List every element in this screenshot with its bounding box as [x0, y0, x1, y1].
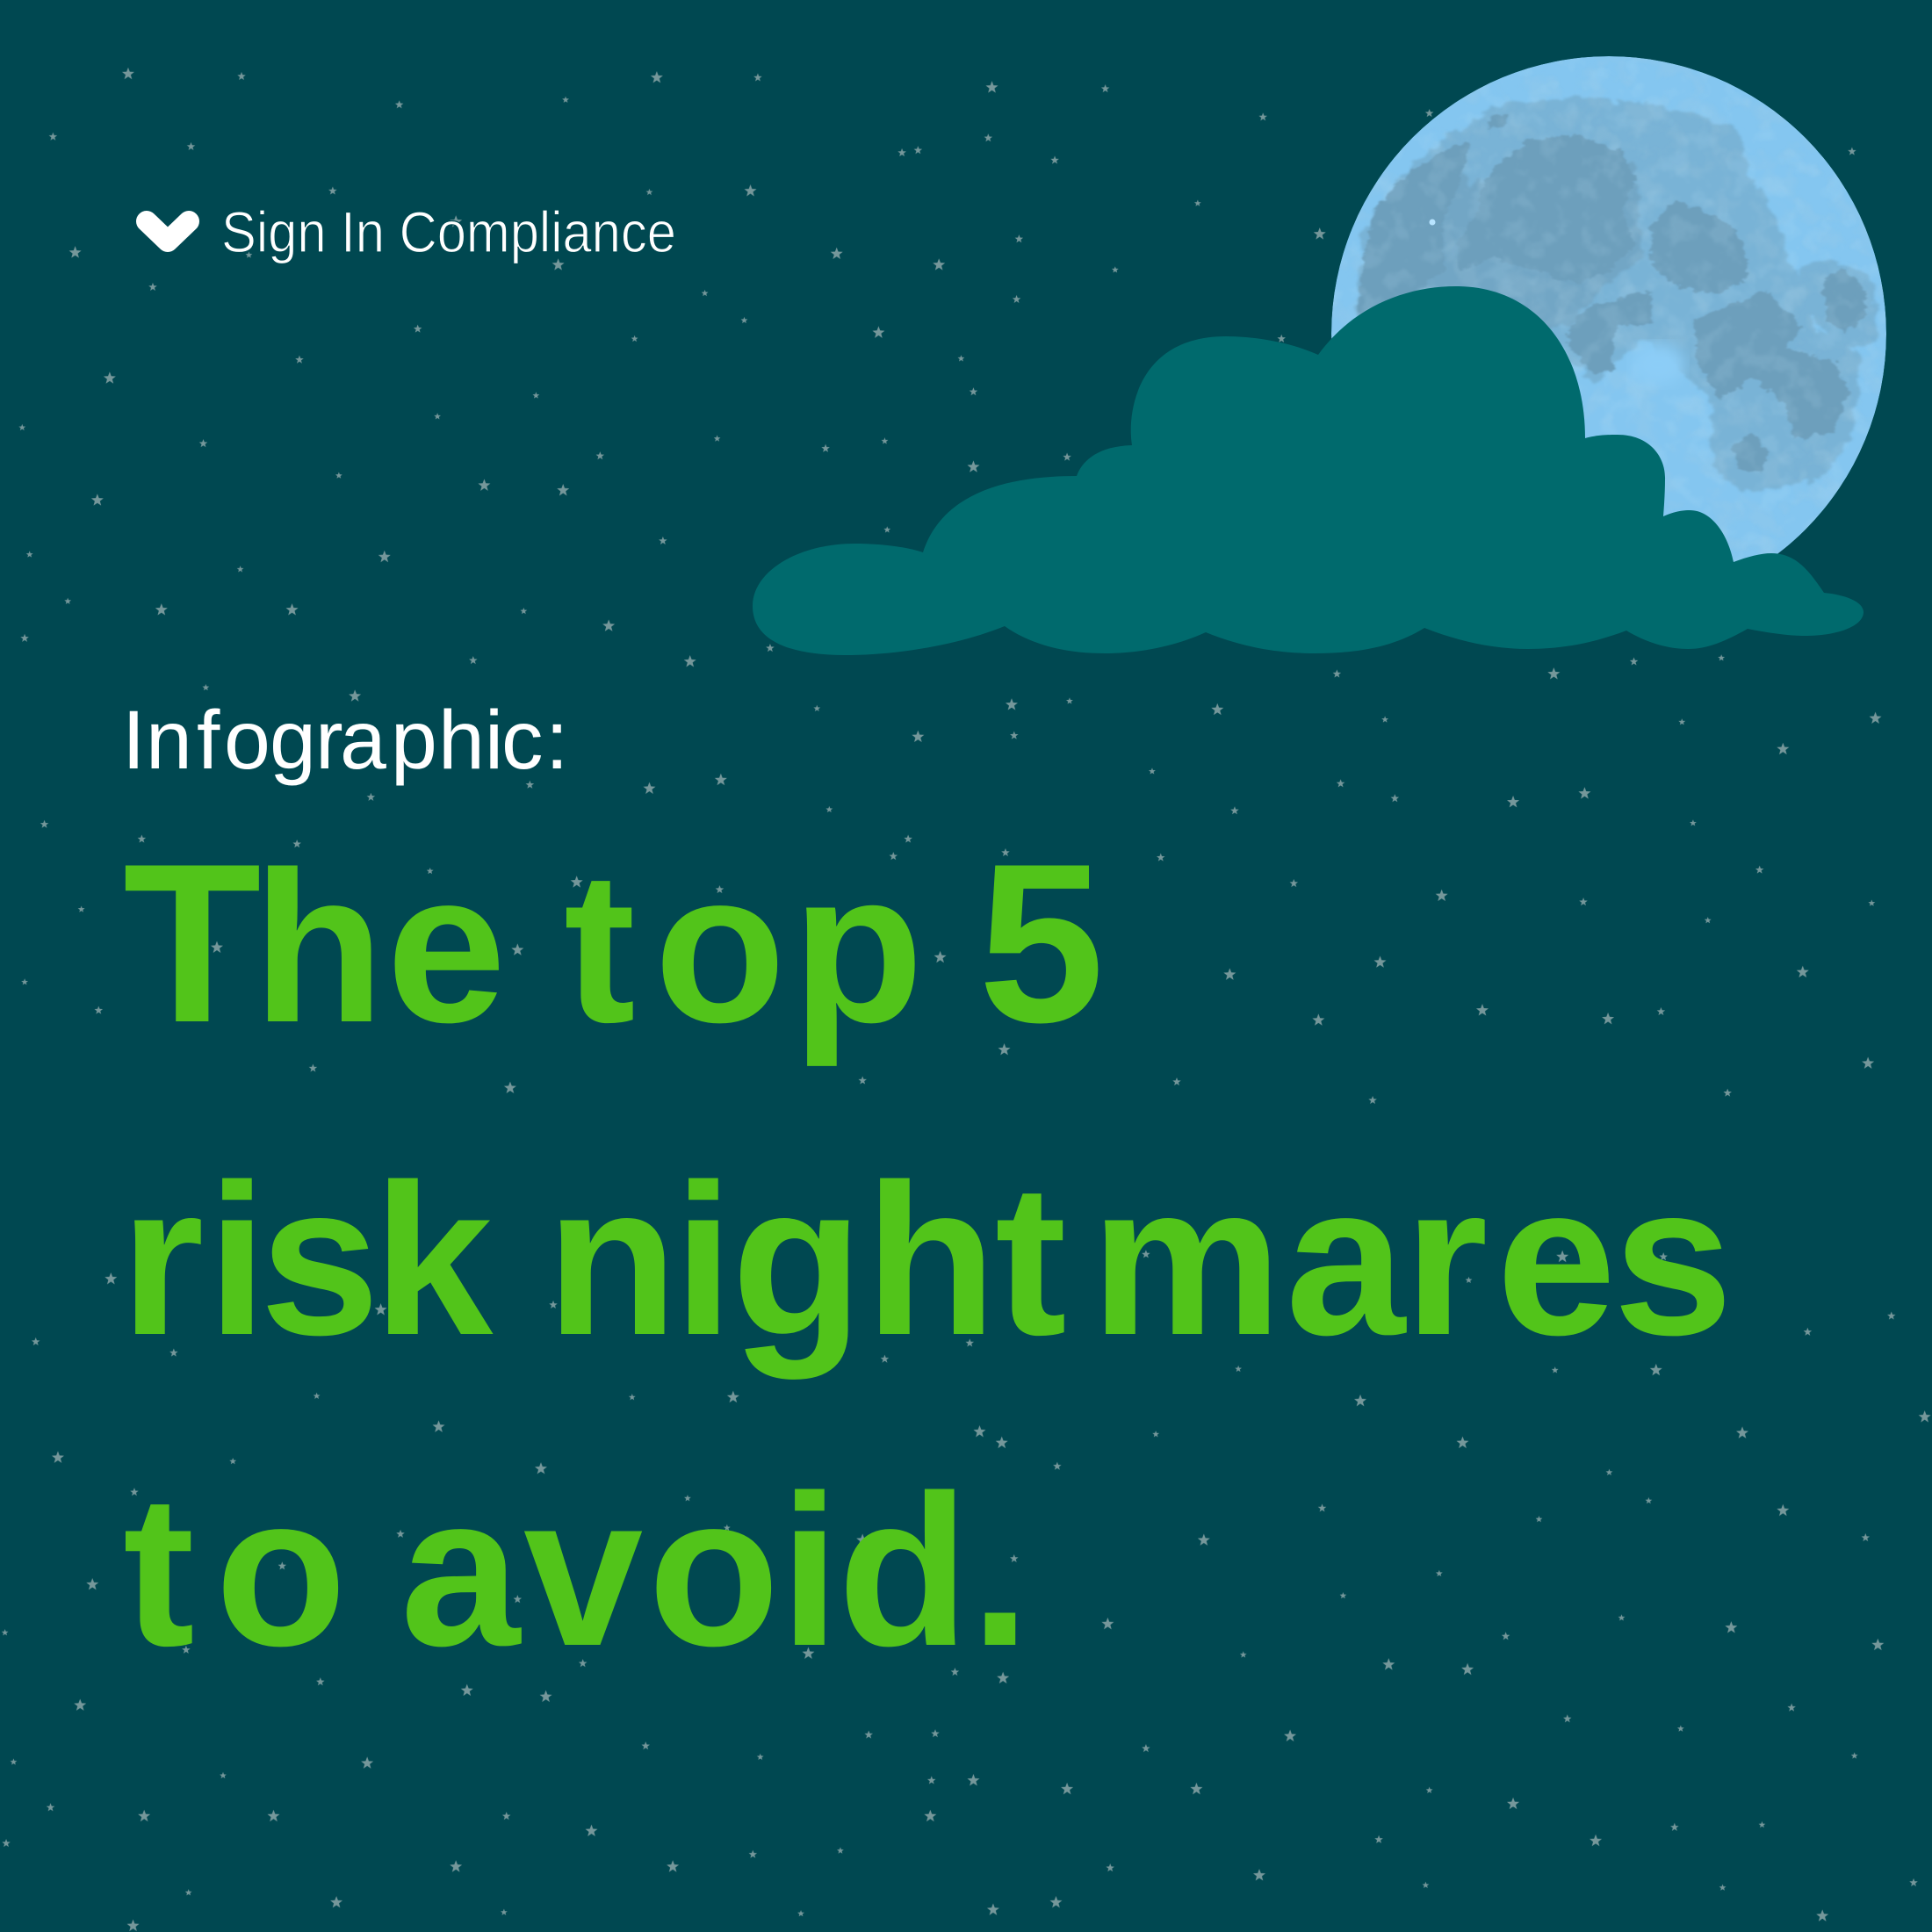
- brand name: Sign In Compliance: [221, 199, 676, 264]
- cloud: [753, 286, 1864, 655]
- moon: [1331, 56, 1889, 611]
- moon bright crater: [1430, 220, 1435, 225]
- moon mid tones: [1355, 97, 1878, 494]
- icon: logo chevron: [147, 221, 189, 242]
- moon mottling light: [1333, 68, 1879, 525]
- moon mottling dark: [1358, 58, 1883, 492]
- moon northwest shading: [1359, 159, 1643, 342]
- eyebrow: Infographic: Infographic:: [122, 694, 568, 787]
- title: The top 5: [123, 816, 1105, 1070]
- moon bright patch: [1649, 339, 1688, 373]
- title: to avoid.: [123, 1450, 1030, 1690]
- title: [120, 816, 1733, 1690]
- star on moon edge: [1877, 245, 1889, 256]
- title: risk nightmares: [120, 1139, 1733, 1380]
- logo: [147, 199, 676, 264]
- moon dark seas: [1358, 113, 1866, 472]
